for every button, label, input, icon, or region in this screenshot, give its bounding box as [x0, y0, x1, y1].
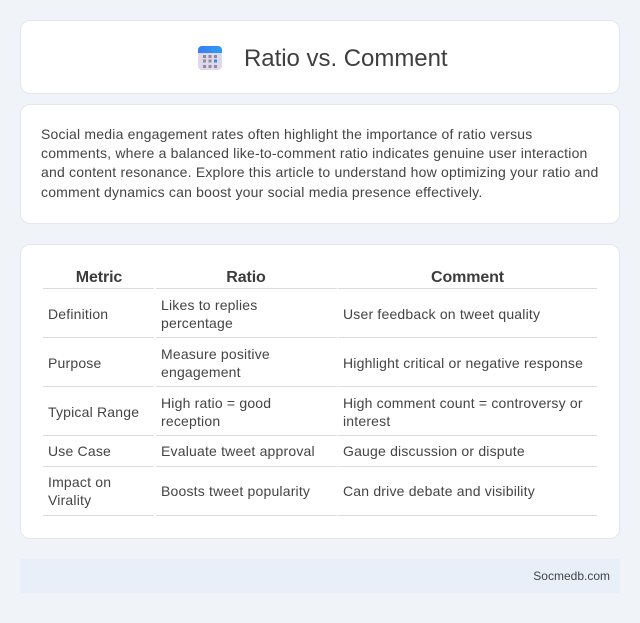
row: purpose: Highlight critical or negative response — [343, 355, 583, 371]
table header: Ratio — [226, 269, 266, 286]
text block: introduction: comment dynamics can boost your social media presence effectively. — [41, 184, 482, 200]
row: definition: Likes to replies — [161, 297, 257, 313]
row: definition — [48, 297, 540, 331]
row: impact on virality — [48, 474, 535, 508]
row: use case: Gauge discussion or dispute — [343, 443, 525, 459]
row: purpose: engagement — [161, 364, 241, 380]
row: impact on virality: Impact on — [48, 474, 111, 490]
panel: comparison table — [20, 244, 620, 539]
row: purpose: Measure positive — [161, 346, 270, 362]
footer text: Socmedb.com — [533, 569, 610, 583]
row: typical range — [48, 395, 583, 429]
row: typical range: High ratio = good — [161, 395, 271, 411]
text block: introduction: and content resonance. Explore this article to understand how optimizing your ratio and — [41, 164, 598, 180]
title: Ratio vs. Comment — [244, 45, 448, 72]
footer bar — [20, 559, 620, 593]
panel: title card — [20, 20, 620, 94]
row: typical range: Typical Range — [48, 404, 139, 420]
table header — [76, 269, 504, 286]
text block: introduction: Social media engagement rates often highlight the importance of ratio versus — [41, 126, 532, 142]
row: typical range: High comment count = controversy or — [343, 395, 583, 411]
row: impact on virality: Boosts tweet popularity — [161, 483, 310, 499]
row: impact on virality: Can drive debate and visibility — [343, 483, 535, 499]
row: definition: Definition — [48, 306, 108, 322]
row: impact on virality: Virality — [48, 492, 91, 508]
row: typical range: interest — [343, 413, 390, 429]
table header: Comment — [431, 269, 504, 286]
table header: Metric — [76, 269, 122, 286]
row: purpose — [48, 346, 583, 380]
row: typical range: reception — [161, 413, 220, 429]
row: use case — [48, 443, 525, 459]
row: use case: Use Case — [48, 443, 111, 459]
row: definition: User feedback on tweet quality — [343, 306, 540, 322]
row: definition: percentage — [161, 315, 233, 331]
icon: calendar — [198, 46, 222, 70]
row: use case: Evaluate tweet approval — [161, 443, 315, 459]
panel: introduction — [20, 104, 620, 224]
row: purpose: Purpose — [48, 355, 101, 371]
text block: introduction: comments, where a balanced like-to-comment ratio indicates genuine user interaction — [41, 145, 588, 161]
text block: introduction — [41, 126, 598, 200]
